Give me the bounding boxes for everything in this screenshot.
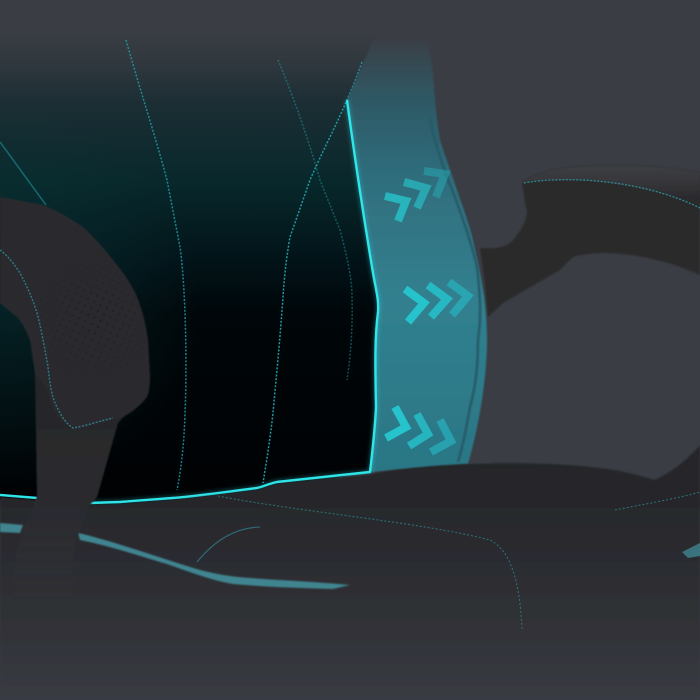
arrows: top group xyxy=(385,171,445,221)
armrest stitching xyxy=(0,250,113,428)
chair back panel xyxy=(0,30,380,510)
arrows: middle group xyxy=(405,282,468,322)
arrows: bottom group xyxy=(386,407,451,452)
left arm post xyxy=(10,370,125,620)
left armrest xyxy=(0,197,150,430)
glowing edge xyxy=(90,100,378,503)
seat blue trim xyxy=(78,533,350,589)
stitching on back xyxy=(0,40,362,490)
right arm support xyxy=(650,445,700,505)
seat xyxy=(0,463,700,700)
side panel xyxy=(0,40,487,503)
seat stitching xyxy=(197,492,700,630)
right armrest xyxy=(480,165,700,317)
